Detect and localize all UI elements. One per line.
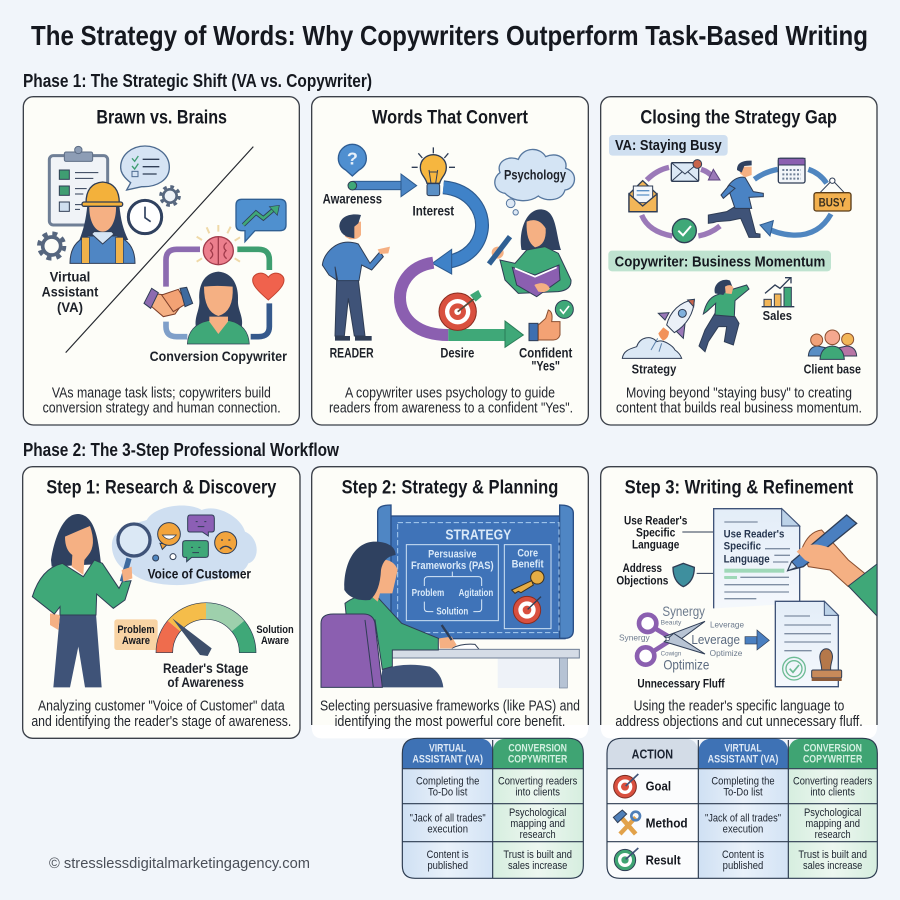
table: comparison without action column: VIRTUAL xyxy=(429,743,466,755)
blueprint: Persuasive xyxy=(428,549,476,561)
table: action comparison: into clients xyxy=(810,786,855,798)
panel: Closing the Strategy Gap xyxy=(601,97,877,425)
icon: chart speech bubble xyxy=(236,199,286,242)
labels: strategy and client base: Client base xyxy=(804,363,861,377)
table: comparison without action column: COPYWRITER xyxy=(508,754,567,766)
gauge: stage of awareness: Solution xyxy=(256,624,294,636)
table: comparison without action column: "Jack of all trades" xyxy=(410,813,486,825)
table: comparison without action column: CONVERSION xyxy=(508,743,567,755)
footer: copyright: © stresslessdigitalmarketingagency.com xyxy=(49,856,310,872)
table: action comparison: Psychological xyxy=(804,807,861,819)
icon: calendar xyxy=(778,158,805,183)
heading: step 2: Step 2: Strategy & Planning xyxy=(342,478,558,499)
label: copywriter business momentum: Copywriter: Business Momentum xyxy=(615,255,825,271)
table: comparison without action column: Trust is built and xyxy=(503,849,572,861)
caption: and identifying the reader's stage of awareness. xyxy=(31,713,291,730)
table: comparison without action column: mapping and xyxy=(510,818,565,830)
labels: stages: READER xyxy=(330,345,374,360)
label: reader's stage of awareness: of Awareness xyxy=(167,675,244,690)
icon: open envelope xyxy=(629,181,657,212)
labels: left callouts: Use Reader's xyxy=(624,513,688,527)
blueprint: Frameworks (PAS) xyxy=(411,560,494,572)
table: action comparison: sales increase xyxy=(803,860,862,872)
icon: target xyxy=(439,290,482,330)
labels: left callouts: Language xyxy=(632,538,680,552)
arrow: desire to yes xyxy=(448,321,523,347)
figure: running copywriter xyxy=(699,280,749,352)
labels: stages: Desire xyxy=(440,345,475,360)
icon: heart xyxy=(253,273,284,300)
label: reader's stage of awareness xyxy=(163,661,249,690)
panel: Step 2 Strategy & Planning xyxy=(312,467,588,738)
table: action comparison: mapping and xyxy=(805,818,860,830)
labels: left callouts xyxy=(616,513,714,587)
icon: client base xyxy=(808,330,857,359)
document: final with stamp xyxy=(775,601,842,687)
caption: identifying the most powerful core benefit. xyxy=(335,713,565,730)
scissors and fluff words: Optimize xyxy=(710,648,743,658)
arrow: purple curve xyxy=(400,263,448,335)
cloud: psychology xyxy=(495,149,574,215)
icon: busy sign: BUSY xyxy=(819,195,847,209)
table: comparison without action column: into clients xyxy=(515,786,560,798)
heading: Brawn vs. Brains: Brawn vs. Brains xyxy=(96,108,227,129)
table: action comparison: published xyxy=(723,860,763,872)
panel: Step 3 Writing & Refinement xyxy=(601,467,877,738)
icon: sales chart xyxy=(762,278,794,307)
table: comparison without action column: Content is xyxy=(427,849,469,861)
label: reader's stage of awareness: Reader's Stage xyxy=(163,661,249,676)
table: comparison without action column: published xyxy=(427,860,468,872)
labels: strategy and client base xyxy=(632,363,861,377)
icon: result target xyxy=(614,848,638,871)
tables xyxy=(402,738,877,878)
table: action comparison: Content is xyxy=(722,849,764,861)
hand with pen xyxy=(788,515,877,616)
label: VA staying busy: VA: Staying Busy xyxy=(615,138,722,154)
label: virtual assistant: Virtual xyxy=(50,269,90,284)
icon: method tools xyxy=(613,810,640,834)
labels: left callouts: Address xyxy=(623,561,662,575)
cloud: voice of customer xyxy=(112,506,257,585)
icon: mail xyxy=(671,160,702,181)
scissors and fluff words: Synergy xyxy=(619,633,650,643)
gauge: stage of awareness: Problem xyxy=(117,624,155,636)
figure: reader xyxy=(322,214,390,341)
icon: rocket xyxy=(622,299,694,358)
busy loop arrows xyxy=(642,167,831,236)
heading: step 3: Step 3: Writing & Refinement xyxy=(625,478,854,499)
label: VA staying busy xyxy=(609,135,728,156)
figure: conversion copywriter xyxy=(187,272,249,344)
scissors and fluff words: Optimize xyxy=(663,656,710,672)
scissors and fluff words: Cowign xyxy=(661,651,682,658)
caption: Moving beyond "staying busy" to creating xyxy=(626,384,852,401)
blueprint: Solution xyxy=(436,606,468,617)
table: action comparison: ASSISTANT (VA) xyxy=(708,754,779,766)
arrow: interest to desire xyxy=(432,187,482,274)
panel: Step 1 Research & Discovery xyxy=(23,467,300,738)
blueprint: Benefit xyxy=(512,559,544,571)
table: action comparison: To-Do list xyxy=(723,786,763,798)
caption xyxy=(615,698,863,730)
label: virtual assistant: (VA) xyxy=(57,300,83,315)
cloud: psychology: Psychology xyxy=(504,167,566,182)
scissors and fluff words: Leverage xyxy=(710,620,744,630)
scissors and fluff words: Synergy xyxy=(662,603,705,619)
label: sales: Sales xyxy=(763,309,792,323)
document: draft: Specific xyxy=(724,540,761,552)
table: action comparison: Completing the xyxy=(711,775,775,787)
divider line xyxy=(66,147,253,353)
connection loop xyxy=(166,249,269,337)
scissors and fluff words: Beauty xyxy=(661,620,682,627)
label: unnecessary fluff: Unnecessary Fluff xyxy=(637,677,726,691)
icon: clipboard xyxy=(49,146,108,225)
label: virtual assistant: Assistant xyxy=(42,285,99,300)
table: comparison without action column: research xyxy=(520,829,556,841)
caption: Analyzing customer "Voice of Customer" data xyxy=(38,698,285,715)
icon: clock xyxy=(128,200,162,234)
table: action comparison: research xyxy=(815,829,851,841)
heading: phase 1: Phase 1: The Strategic Shift (VA vs. Copywriter) xyxy=(23,71,372,91)
document: draft: Use Reader's xyxy=(724,528,784,540)
cloud: voice of customer: Voice of Customer xyxy=(148,566,252,581)
caption: Using the reader's specific language to xyxy=(634,698,844,715)
gauge: stage of awareness: Aware xyxy=(122,635,150,647)
caption: readers from awareness to a confident "Yes". xyxy=(329,400,573,417)
icon: question bubble xyxy=(338,144,366,176)
heading: Words That Convert: Words That Convert xyxy=(372,108,528,129)
icon: small gear xyxy=(161,187,179,205)
caption xyxy=(43,384,281,417)
figure: running VA xyxy=(708,161,763,237)
table: action comparison: execution xyxy=(723,824,763,836)
scissors and fluff words: Leverage xyxy=(691,632,740,647)
icon: question bubble: ? xyxy=(347,149,358,169)
table: action comparison: Result xyxy=(646,852,681,867)
table: comparison without action column: To-Do list xyxy=(428,786,468,798)
caption: VAs manage task lists; copywriters build xyxy=(52,384,271,401)
table: action comparison: COPYWRITER xyxy=(803,754,862,766)
blueprint xyxy=(378,505,573,639)
icon: busy sign xyxy=(814,178,851,211)
caption: conversion strategy and human connection. xyxy=(43,400,281,417)
figure: planner at desk xyxy=(321,542,457,687)
gauge: stage of awareness xyxy=(114,603,294,656)
table: comparison without action column: ASSISTANT (VA) xyxy=(412,754,483,766)
figure: virtual assistant with hard hat xyxy=(70,182,135,263)
icon: shield xyxy=(673,563,694,587)
label: conversion copywriter: Conversion Copywriter xyxy=(150,349,288,364)
gauge: stage of awareness: Aware xyxy=(261,635,289,647)
blueprint: STRATEGY xyxy=(445,527,512,543)
table: comparison without action column: sales increase xyxy=(508,860,567,872)
table: comparison without action column: Psychological xyxy=(509,807,566,819)
table: comparison without action column xyxy=(402,738,583,878)
caption xyxy=(320,698,580,730)
figure: copywriter reading xyxy=(489,209,571,297)
icon: goal target xyxy=(614,774,638,798)
desk xyxy=(391,644,579,688)
panel: Brawn vs. Brains xyxy=(23,97,299,425)
labels: stages: Confident xyxy=(519,345,573,360)
heading: step 1: Step 1: Research & Discovery xyxy=(46,478,277,499)
blueprint: Agitation xyxy=(459,588,493,599)
table: action comparison: "Jack of all trades" xyxy=(705,813,781,825)
caption xyxy=(616,384,862,417)
labels: stages xyxy=(330,345,573,374)
blueprint: Core xyxy=(517,548,538,560)
caption xyxy=(31,698,291,730)
caption: A copywriter uses psychology to guide xyxy=(345,384,555,401)
icon: task speech bubble xyxy=(121,146,169,190)
table: action comparison: Goal xyxy=(646,779,671,794)
figure: researcher with magnifier xyxy=(32,514,150,687)
table: action comparison xyxy=(607,738,877,878)
table: action comparison: Trust is built and xyxy=(798,849,867,861)
table: comparison without action column: Completing the xyxy=(416,775,479,787)
arrow: to final document xyxy=(745,630,769,650)
icon: handshake xyxy=(144,287,193,317)
caption: Selecting persuasive frameworks (like PAS) and xyxy=(320,698,580,715)
heading: Closing the Strategy Gap: Closing the Strategy Gap xyxy=(640,108,837,129)
icon: light bulb xyxy=(412,147,455,196)
icon: check badge xyxy=(672,219,696,243)
table: action comparison: ACTION xyxy=(632,747,673,761)
label: virtual assistant xyxy=(42,269,99,315)
heading: phase 2: Phase 2: The 3-Step Professional Workflow xyxy=(23,440,340,460)
scissors and fluff words xyxy=(619,603,744,672)
document: draft: Language xyxy=(724,553,770,565)
labels: stages: "Yes" xyxy=(531,359,560,374)
table: action comparison: Converting readers xyxy=(793,775,873,787)
caption xyxy=(329,384,573,417)
arrow: awareness to interest xyxy=(348,174,417,197)
table: comparison without action column: Converting readers xyxy=(498,775,578,787)
icon: thumbs up xyxy=(529,300,573,341)
table: comparison without action column: execution xyxy=(427,824,468,836)
panel: Words That Convert xyxy=(312,97,588,425)
labels: left callouts: Objections xyxy=(616,573,669,587)
label: awareness: Awareness xyxy=(323,191,382,206)
table: action comparison: CONVERSION xyxy=(803,743,862,755)
icon: brain xyxy=(197,225,240,265)
labels: strategy and client base: Strategy xyxy=(632,363,676,377)
table: action comparison: VIRTUAL xyxy=(724,743,762,755)
document: draft xyxy=(714,509,800,608)
labels: left callouts: Specific xyxy=(636,525,676,539)
label: interest: Interest xyxy=(412,203,455,218)
blueprint: Problem xyxy=(412,588,444,599)
table: action comparison: Method xyxy=(646,815,688,830)
icon: large gear xyxy=(39,233,64,259)
